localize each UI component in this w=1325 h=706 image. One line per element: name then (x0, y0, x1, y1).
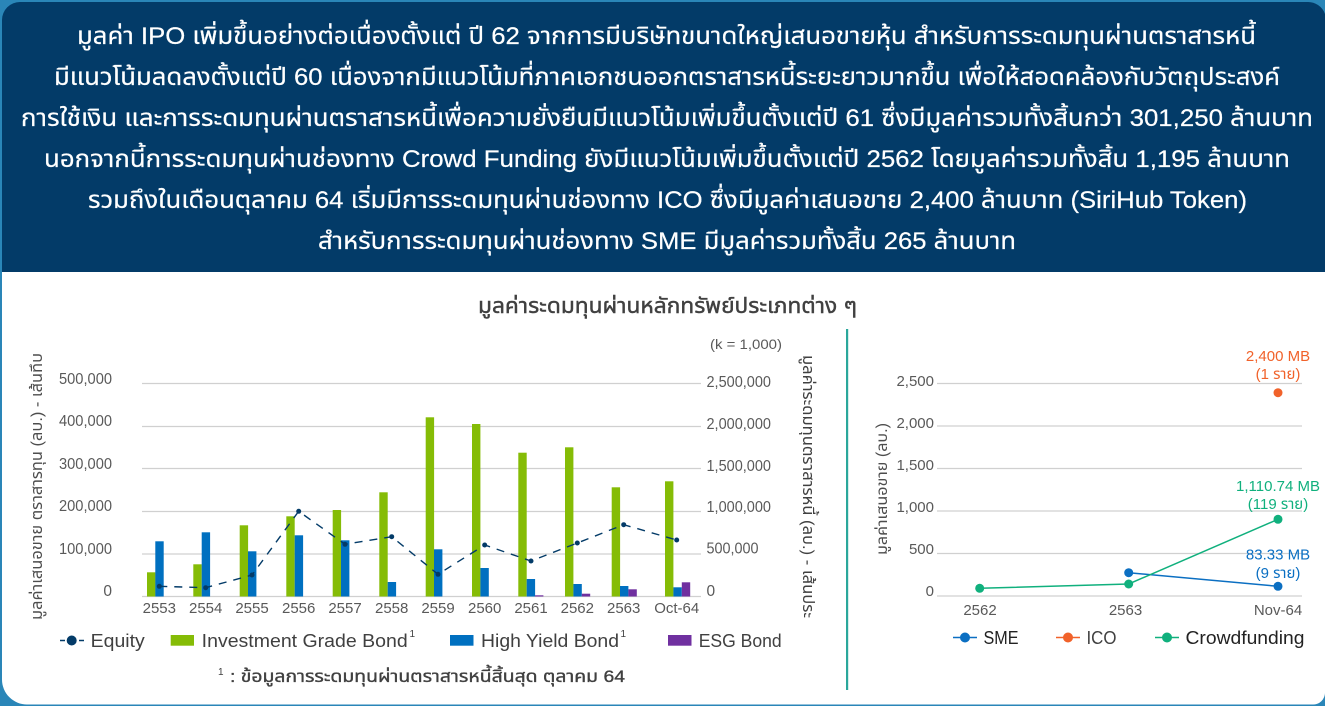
x axis labels: 2556 (282, 600, 315, 617)
x axis labels: 2557 (328, 600, 362, 617)
x axis labels: Oct-64 (654, 600, 699, 617)
y axis title: มูลค่าเสนอขาย (ลบ.) (873, 423, 891, 555)
header line 4: นอกจากนี้การระดมทุนผ่านช่องทาง Crowd Funding ยังมีแนวโน้มเพิ่มขึ้นตั้งแต่ปี 2562 โดยมูลค่ารวมทั้งสิ้น 1,195 ล้านบาท (44, 142, 1290, 174)
left axis labels: 200,000 (59, 498, 112, 515)
header line 5: รวมถึงในเดือนตุลาคม 64 เริ่มมีการระดมทุนผ่านช่องทาง ICO ซึ่งมีมูลค่าเสนอขาย 2,400 ล้านบาท (SiriHub Token) (88, 183, 1247, 215)
right axis unit note: (k = 1,000) (710, 336, 782, 352)
vertical divider (846, 329, 848, 690)
footnote: : ข้อมูลการระดมทุนผ่านตราสารหนี้สิ้นสุด ตุลาคม 64 (230, 664, 625, 688)
footnote: 1 (218, 667, 224, 678)
ICO callout: (1 ราย) (1256, 366, 1300, 383)
panel: SME ICO crowdfunding line chart (873, 348, 1320, 648)
panel: securities fundraising bar chart (28, 336, 820, 688)
left axis title: มูลค่าเสนอขาย ตราสารทุน (ลบ.) - เส้นทึบ (28, 353, 46, 620)
right axis labels: 500,000 (706, 540, 759, 558)
y axis labels: 1,000 (896, 499, 934, 516)
chart section title: มูลค่าระดมทุนผ่านหลักทรัพย์ประเภทต่าง ๆ (478, 294, 857, 319)
header line 2: มีแนวโน้มลดลงตั้งแต่ปี 60 เนื่องจากมีแนวโน้มที่ภาคเอกชนออกตราสารหนี้ระยะยาวมากขึ้น เพื่อให้สอดคล้องกับวัตถุประสงค์ (54, 60, 1280, 92)
crowdfunding line (975, 515, 1282, 593)
legend: ICO (1056, 628, 1116, 648)
x axis labels: 2562 (561, 600, 594, 617)
x axis labels: 2553 (143, 600, 176, 617)
equity dashed line (157, 509, 679, 590)
y axis labels: 2,000 (896, 415, 934, 432)
legend: high yield bond: 1 (620, 629, 626, 640)
x axis labels: 2558 (375, 600, 408, 617)
legend: equity (60, 631, 145, 651)
left axis labels: 100,000 (59, 541, 112, 558)
right axis labels: 2,000,000 (706, 416, 771, 433)
crowdfunding callout (1236, 478, 1320, 513)
ICO callout: 2,400 MB (1246, 348, 1310, 365)
SME callout (1246, 546, 1310, 582)
header line 6: สำหรับการระดมทุนผ่านช่องทาง SME มีมูลค่ารวมทั้งสิ้น 265 ล้านบาท (318, 225, 1016, 256)
y axis labels (896, 373, 934, 600)
right axis labels: 2,500,000 (706, 374, 771, 391)
x axis labels (143, 600, 699, 617)
ICO callout (1246, 348, 1310, 383)
footnote (218, 664, 625, 688)
header line 3: การใช้เงิน และการระดมทุนผ่านตราสารหนี้เพื่อความยั่งยืนมีแนวโน้มเพิ่มขึ้นตั้งแต่ปี 61 ซึ่งมีมูลค่ารวมทั้งสิ้นกว่า 301,250 ล้านบาท (21, 101, 1313, 133)
right axis labels: 1,500,000 (706, 458, 771, 475)
y axis labels: 1,500 (896, 457, 934, 474)
legend: investment grade bond: 1 (410, 629, 416, 640)
legend: investment grade bond: Investment Grade Bond (202, 631, 408, 651)
right axis labels: 0 (706, 583, 716, 600)
crowdfunding callout: 1,110.74 MB (1236, 478, 1320, 495)
x axis labels: 2561 (514, 600, 548, 617)
high yield bond bars (155, 532, 682, 596)
left axis labels: 500,000 (59, 371, 112, 388)
left axis labels: 300,000 (59, 456, 112, 473)
left axis labels: 400,000 (59, 413, 112, 430)
x axis labels: 2555 (235, 600, 269, 617)
legend: high yield bond: High Yield Bond (481, 631, 619, 651)
legend: SME (953, 628, 1018, 648)
SME callout: (9 ราย) (1256, 565, 1300, 582)
x axis labels: 2559 (421, 600, 455, 617)
investment grade bond bars (147, 417, 673, 596)
legend: equity: Equity (91, 631, 145, 651)
esg bond bars (535, 582, 690, 596)
bar chart legend (60, 629, 782, 651)
x axis labels (963, 602, 1302, 619)
header panel (2, 2, 1325, 272)
left axis labels: 0 (103, 583, 112, 600)
legend: ICO: ICO (1086, 628, 1116, 648)
right axis labels (706, 374, 771, 600)
x axis labels: 2560 (468, 600, 501, 617)
ICO point (1274, 388, 1282, 397)
line chart legend (953, 628, 1304, 648)
x axis labels: 2562 (963, 602, 997, 619)
y axis labels: 500 (909, 541, 934, 558)
SME line (1124, 568, 1282, 591)
SME callout: 83.33 MB (1246, 546, 1310, 564)
x axis labels: 2554 (189, 600, 222, 617)
x axis labels: Nov-64 (1254, 602, 1302, 619)
y axis labels: 0 (926, 583, 934, 600)
y axis labels: 2,500 (896, 373, 934, 390)
right axis title: มูลค่าระดมทุนตราสารหนี้ (ลบ.) - เส้นประ (799, 355, 820, 618)
crowdfunding callout: (119 ราย) (1248, 496, 1308, 513)
x axis labels: 2563 (1109, 602, 1142, 619)
legend: esg bond: ESG Bond (699, 631, 782, 651)
right axis labels: 1,000,000 (706, 499, 771, 516)
legend: high yield bond (450, 629, 626, 651)
left axis labels (59, 371, 112, 600)
legend: crowdfunding: Crowdfunding (1186, 628, 1304, 648)
header line 1: มูลค่า IPO เพิ่มขึ้นอย่างต่อเนื่องตั้งแต่ ปี 62 จากการมีบริษัทขนาดใหญ่เสนอขายหุ้น สำหรับการระดมทุนผ่านตราสารหนี้ (77, 19, 1256, 51)
legend: SME: SME (984, 628, 1018, 648)
x axis labels: 2563 (607, 600, 640, 617)
